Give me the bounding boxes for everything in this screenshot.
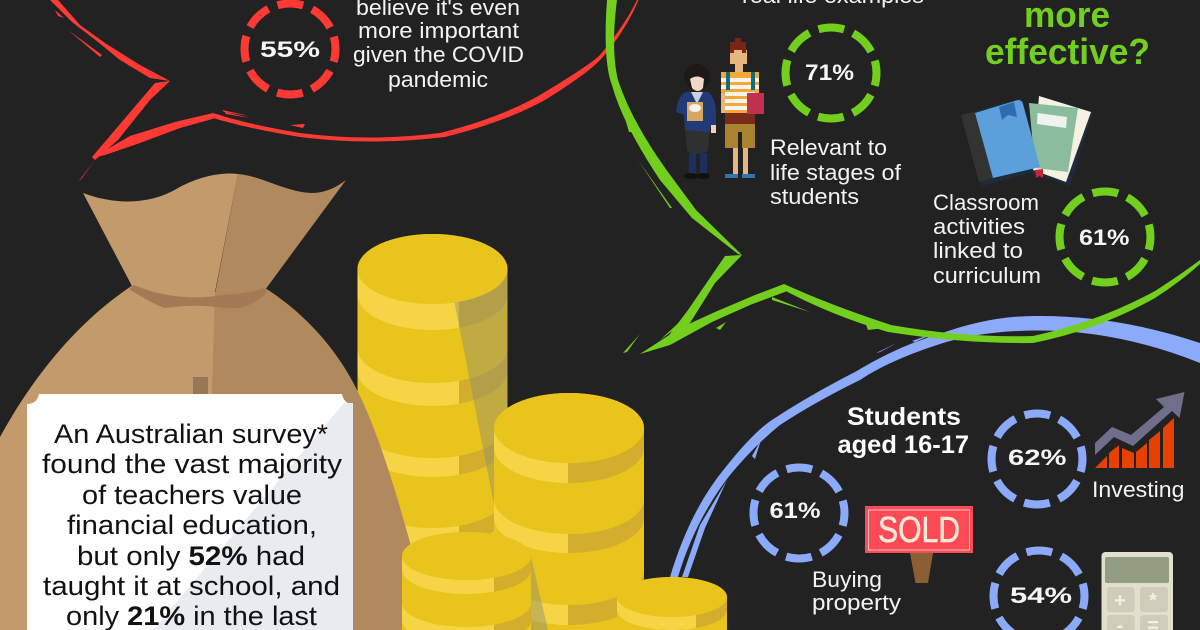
money bag: [0, 174, 433, 630]
speech bubble outline: green: [606, 0, 1200, 354]
ring: 61% classroom: [1060, 192, 1150, 282]
text: COVID importance: [353, 0, 524, 92]
icon: calculator: [1102, 552, 1173, 630]
icon: sold sign: [865, 506, 973, 583]
heading: more effective: effective?: [985, 31, 1150, 72]
text: COVID importance: pandemic: [388, 67, 488, 92]
ring: 62%: 62%: [1008, 445, 1066, 470]
speech bubble outline: red: [50, 0, 638, 182]
label: buying property: property: [812, 590, 901, 615]
heading: more effective: [985, 0, 1150, 72]
girl student: [676, 64, 716, 179]
text: relevant to life stages: students: [770, 184, 859, 209]
survey text: An Australian survey*: [54, 419, 329, 449]
ring: 62%: [992, 414, 1082, 504]
ring: 55%: 55%: [260, 37, 320, 62]
survey text: taught it at school, and: [43, 571, 340, 601]
ring: 61% property: [754, 468, 844, 558]
text: classroom activities: activities: [933, 214, 1025, 239]
heading: students aged 16-17: Students: [847, 403, 961, 431]
survey text: [42, 419, 343, 630]
label: buying property: Buying: [812, 567, 882, 592]
text: COVID importance: given the COVID: [353, 42, 524, 67]
icon: two students: [676, 38, 764, 179]
survey text: found the vast majority: [42, 449, 343, 479]
icon: calculator: +: [1114, 590, 1126, 612]
ring: 54%: [994, 550, 1084, 630]
icon: rising chart: [1095, 392, 1184, 468]
ring: 71%: [786, 28, 876, 118]
text: classroom activities: [933, 190, 1041, 288]
ring: 54%: 54%: [1010, 583, 1072, 608]
coin stack: middle: [494, 393, 644, 630]
text: classroom activities: Classroom: [933, 190, 1039, 215]
label: buying property: [812, 567, 901, 615]
speech bubble outline: blue: [670, 316, 1200, 577]
boy student: [721, 38, 764, 178]
icon: sold sign: SOLD: [878, 509, 960, 550]
ring: 55%: [244, 4, 336, 94]
survey text: financial education,: [67, 510, 317, 540]
text: relevant to life stages: Relevant to: [770, 135, 887, 160]
coin stack: tall back stack: [358, 234, 508, 544]
coin stack: small front right: [617, 577, 727, 630]
text: classroom activities: curriculum: [933, 263, 1041, 288]
text: relevant to life stages: life stages of: [770, 160, 902, 185]
text: relevant to life stages: [770, 135, 902, 209]
heading: students aged 16-17: aged 16-17: [838, 431, 969, 459]
survey text: but only 52% had: [77, 541, 305, 571]
label: investing: Investing: [1092, 477, 1184, 502]
survey text: of teachers value: [82, 480, 302, 510]
ring: 71%: 71%: [805, 60, 854, 85]
icon: books: [961, 96, 1093, 186]
icon: calculator: *: [1149, 590, 1157, 612]
text: COVID importance: more important: [358, 18, 519, 43]
coin stack: small front left: [402, 532, 531, 630]
text: classroom activities: linked to: [933, 238, 1023, 263]
note card: [27, 394, 353, 630]
ring: 61% property: 61%: [770, 498, 820, 523]
heading: students aged 16-17: [838, 403, 969, 459]
ring: 61% classroom: 61%: [1079, 225, 1130, 250]
